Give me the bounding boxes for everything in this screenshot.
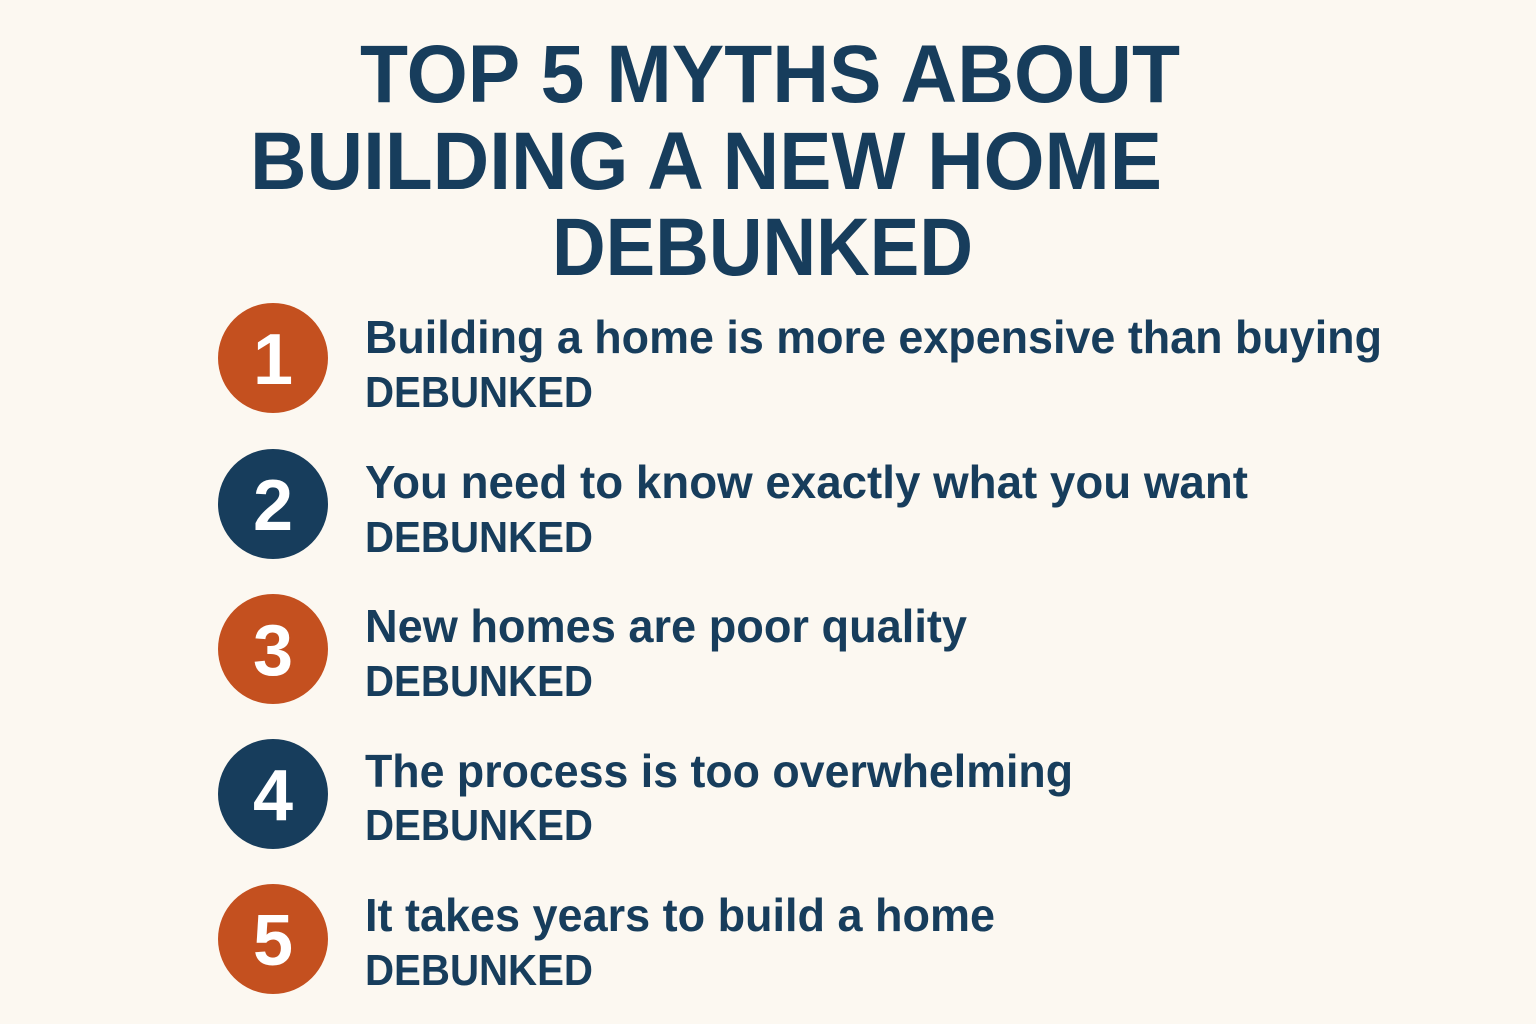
- myth 4 text: The process is too overwhelming: [365, 745, 1073, 797]
- myth 5: [218, 884, 995, 995]
- icon: number 2 circle: [218, 449, 328, 559]
- myth 5 text: It takes years to build a home: [365, 889, 995, 941]
- myth 2: [218, 449, 1248, 562]
- title: BUILDING A NEW HOME: [250, 116, 1162, 207]
- myth 4 text: DEBUNKED: [365, 801, 593, 850]
- icon: number 4 circle: [218, 739, 328, 849]
- title: DEBUNKED: [552, 202, 973, 293]
- myth 4: [218, 739, 1073, 850]
- myth 3 text: [365, 600, 967, 706]
- myth 3: [218, 594, 967, 706]
- icon: number 3 circle: 3: [253, 611, 293, 691]
- myth 5 text: [365, 889, 995, 995]
- myth 4 text: [365, 745, 1073, 850]
- myth 3 text: DEBUNKED: [365, 657, 593, 706]
- myth 3 text: New homes are poor quality: [365, 600, 967, 652]
- title: TOP 5 MYTHS ABOUT: [360, 29, 1180, 120]
- icon: number 2 circle: 2: [253, 466, 293, 546]
- myth 2 text: You need to know exactly what you want: [365, 456, 1248, 508]
- myth 1 text: DEBUNKED: [365, 368, 593, 417]
- myth 1: [218, 303, 1382, 417]
- icon: number 1 circle: 1: [253, 320, 293, 400]
- myth 2 text: DEBUNKED: [365, 513, 593, 562]
- icon: number 5 circle: 5: [253, 901, 293, 981]
- myth 2 text: [365, 456, 1248, 562]
- title: [250, 29, 1180, 293]
- myth 1 text: [365, 311, 1382, 417]
- icon: number 4 circle: 4: [253, 756, 293, 836]
- icon: number 3 circle: [218, 594, 328, 704]
- icon: number 5 circle: [218, 884, 328, 994]
- icon: number 1 circle: [218, 303, 328, 413]
- myth 1 text: Building a home is more expensive than buying: [365, 311, 1382, 363]
- myth 5 text: DEBUNKED: [365, 946, 593, 995]
